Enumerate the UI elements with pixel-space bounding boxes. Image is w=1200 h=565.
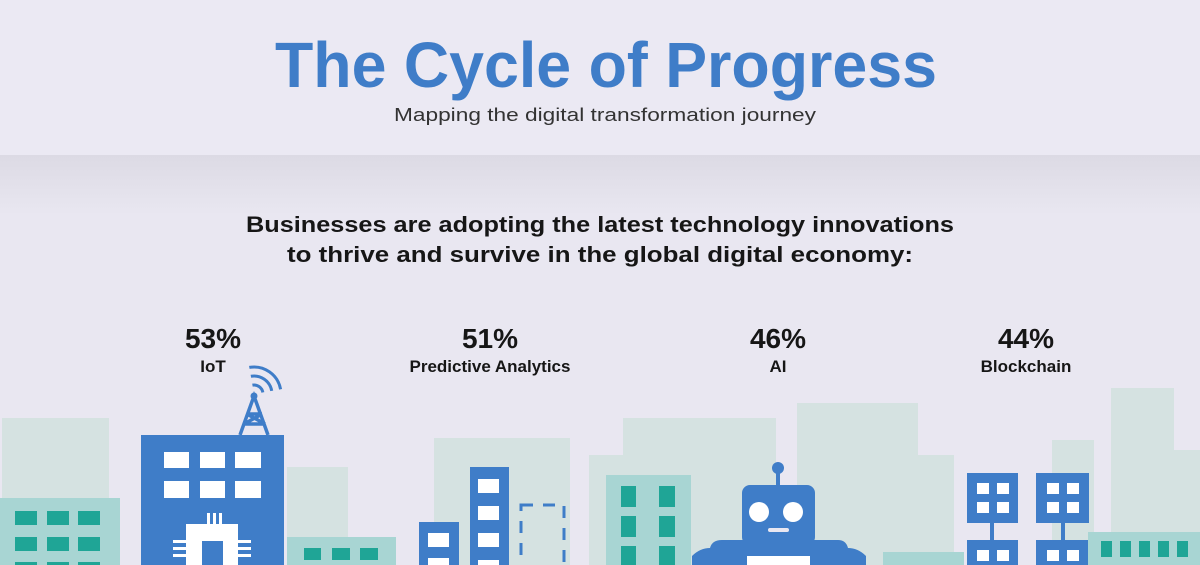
skyline <box>0 363 1200 565</box>
intro text: to thrive and survive in the global digital economy: <box>287 242 913 267</box>
icon: blockchain blocks <box>967 473 1089 565</box>
icon: IoT building with antenna and chip <box>141 363 284 565</box>
stat: AI: AI <box>770 357 786 376</box>
stats <box>185 323 1071 376</box>
subtitle: Mapping the digital transformation journey <box>394 105 816 125</box>
stat: Predictive Analytics: 51% <box>462 323 518 354</box>
intro text <box>246 212 954 267</box>
icon: predictive analytics buildings <box>419 467 564 565</box>
stat: Blockchain <box>981 323 1071 376</box>
stat: Predictive Analytics: Predictive Analytics <box>410 357 570 376</box>
icon: robot <box>692 462 866 565</box>
building: teal low <box>883 552 964 565</box>
building: teal left <box>0 498 120 565</box>
title: The Cycle of Progress <box>275 29 937 101</box>
stat: IoT <box>185 323 241 376</box>
stat: IoT: 53% <box>185 323 241 354</box>
stat: Blockchain: Blockchain <box>981 357 1071 376</box>
building: teal right <box>1088 532 1200 565</box>
intro text: Businesses are adopting the latest technology innovations <box>246 212 954 237</box>
building: teal mid <box>287 537 396 565</box>
stat: Predictive Analytics <box>410 323 570 376</box>
stat: IoT: IoT <box>200 357 226 376</box>
building: teal AI side <box>606 475 691 565</box>
stat: AI <box>750 323 806 376</box>
stat: AI: 46% <box>750 323 806 354</box>
stat: Blockchain: 44% <box>998 323 1054 354</box>
